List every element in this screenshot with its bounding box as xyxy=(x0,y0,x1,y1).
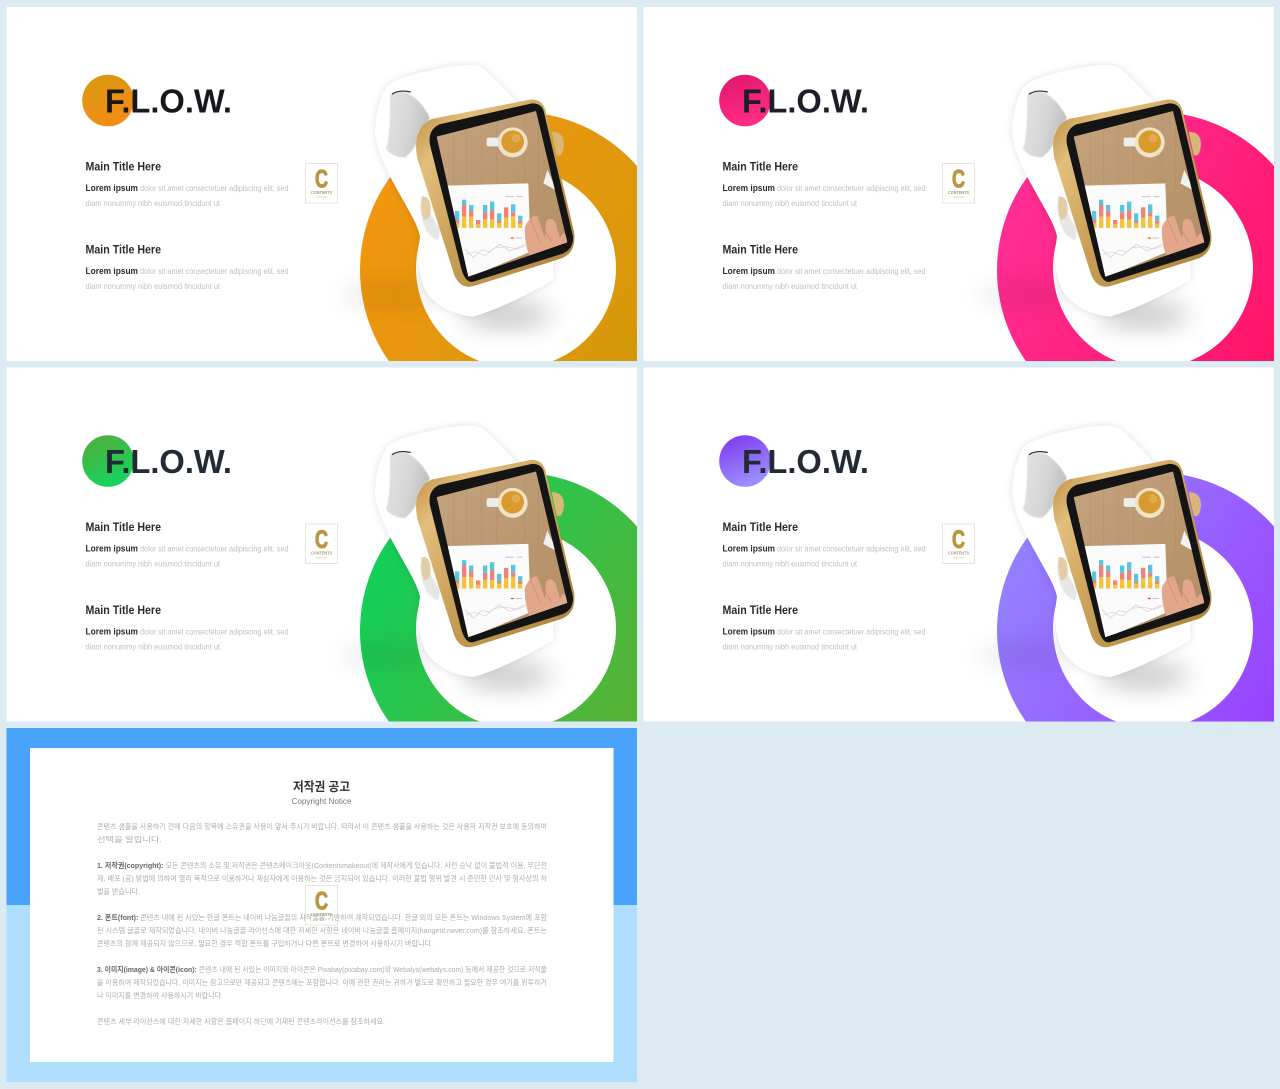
heading: F.L.O.W. with purple circle xyxy=(719,435,869,487)
text block: first item: Main Title Here xyxy=(722,162,798,174)
text block: font clause: 콘텐츠의 함께 제공되지 않으므로, 필요한 경우 적합 폰트를 구입하거나 다른 폰트로 변경하여 사용하시기 바랍니다. xyxy=(97,938,433,948)
text block: second item: Main Title Here xyxy=(86,244,161,256)
text block: first item: Main Title Here xyxy=(722,522,798,534)
heading: F.L.O.W. with orange circle: F.L.O.W. xyxy=(105,82,232,120)
text block: second item: dolor sit amet consectetuer adipiscing elit, sed xyxy=(777,267,926,276)
text block: first item: diam nonummy nibh euismod tincidunt ut xyxy=(722,560,858,568)
heading: F.L.O.W. with pink circle: F.L.O.W. xyxy=(742,82,869,120)
heading: copyright notice xyxy=(292,779,352,806)
text block: first item xyxy=(722,522,926,568)
icon: smart watch xyxy=(977,425,1211,685)
text block: second item: dolor sit amet consectetuer adipiscing elit, sed xyxy=(140,628,288,636)
text block: copyright clause: 벌을 받습니다. xyxy=(97,886,140,896)
text block: second item: dolor sit amet consectetuer adipiscing elit, sed xyxy=(777,628,926,636)
ring: green xyxy=(360,475,637,722)
ring: orange xyxy=(360,114,637,361)
text block: first item: dolor sit amet consectetuer adipiscing elit, sed xyxy=(777,544,926,554)
text block: first item: diam nonummy nibh euismod tincidunt ut xyxy=(86,199,221,208)
panel: green F.L.O.W. slide xyxy=(6,368,637,722)
text block: first item xyxy=(86,162,288,208)
text block: second item: diam nonummy nibh euismod tincidunt ut xyxy=(722,642,858,652)
text block: second item: Lorem ipsum xyxy=(722,626,775,638)
panel: purple F.L.O.W. slide xyxy=(644,368,1274,722)
text block: first item: Lorem ipsum xyxy=(86,544,138,554)
text block: first item: dolor sit amet consectetuer adipiscing elit, sed xyxy=(140,184,288,193)
text block: first item xyxy=(86,522,288,568)
text block: second item: Main Title Here xyxy=(722,244,798,256)
text block: first item: dolor sit amet consectetuer adipiscing elit, sed xyxy=(140,544,288,554)
text block: second item: Lorem ipsum xyxy=(86,626,138,638)
icon: contents logo xyxy=(942,164,974,203)
text block: image and icon clause: 3. 이미지(image) & 아이콘(icon): 콘텐츠 내에 된 사있는 이미지와 아이콘은 Pixabay(pixabay.com)와 Webalys(webalys.com) 등에서 제공한 것으로 저작물 xyxy=(97,964,547,974)
icon: smart watch xyxy=(340,425,574,685)
text block: copyright clause: 재, 배포 (공) 방법에 의하여 영리 목적으로 이용하거나 제삼자에게 이용하는 것은 금지되어 있습니다. 이러한 불법 행위 발견 시 준민한 민사 및 형사상의 처 xyxy=(97,873,547,883)
text block: font clause: 된 시스템 글꼴로 제작되었습니다. 네이버 나눔글꼴 라이선스에 대한 자세한 사항은 네이버 나눔글꼴 홈페이지(hangeul.naver.com)를 참조하세요. 폰트는 xyxy=(97,925,547,935)
text block: first item: Lorem ipsum xyxy=(86,183,138,194)
text block: second item xyxy=(86,244,288,291)
text block: license footer: 콘텐츠 세부 라이선스에 대한 자세한 사항은 홈페이지 하단에 기재된 콘텐츠라이선스를 참조하세요. xyxy=(97,1016,385,1026)
ring: pink xyxy=(997,114,1274,361)
text block: introduction xyxy=(97,821,547,844)
icon: contents logo xyxy=(306,164,338,203)
panel: orange F.L.O.W. slide xyxy=(6,7,637,361)
text block: introduction: 선택을 알립니다. xyxy=(97,834,162,844)
text block: second item xyxy=(86,605,288,652)
text block: first item: dolor sit amet consectetuer adipiscing elit, sed xyxy=(777,184,926,193)
text block: image and icon clause: 나 이미지를 변경하여 사용하시기 바랍니다. xyxy=(97,990,223,1000)
text block: second item: Lorem ipsum xyxy=(722,266,775,277)
icon: contents logo watermark xyxy=(306,886,338,925)
icon: contents logo xyxy=(942,524,974,564)
text block: first item: diam nonummy nibh euismod tincidunt ut xyxy=(722,199,858,208)
text block: first item: Lorem ipsum xyxy=(722,544,775,554)
text block: image and icon clause: 을 이용하여 제작되었습니다. 이미지는 참고으로만 제공되고 콘텐츠에는 포함합니다. 이에 관한 권리는 귀하가 별도로 확인하고 필요한 경우 여기를 위투하거 xyxy=(97,977,547,987)
text block: second item: dolor sit amet consectetuer adipiscing elit, sed xyxy=(140,267,288,276)
heading: F.L.O.W. with green circle: F.L.O.W. xyxy=(105,443,232,480)
icon: smart watch xyxy=(340,65,574,324)
text block: introduction: 콘텐츠 샘플을 사용하기 전에 다음의 항목에 소유권을 사용이 앞서 주시기 바랍니다. 따라서 이 콘텐츠 샘플을 사용하는 것은 사용자 저작권 보호에 동의하여 xyxy=(97,821,547,831)
heading: F.L.O.W. with pink circle xyxy=(719,75,869,126)
text block: second item: diam nonummy nibh euismod tincidunt ut xyxy=(722,282,858,291)
text block: second item: Main Title Here xyxy=(722,605,798,617)
icon: smart watch xyxy=(977,65,1211,324)
heading: copyright notice: Copyright Notice xyxy=(292,796,352,806)
text block: second item xyxy=(722,244,926,291)
text block: copyright clause xyxy=(97,860,547,896)
panel: copyright notice xyxy=(6,728,637,1082)
text block: image and icon clause xyxy=(97,964,547,1000)
panel: pink F.L.O.W. slide xyxy=(644,7,1274,361)
text block: font clause xyxy=(97,912,547,948)
ring: purple xyxy=(997,475,1274,722)
text block: second item: Lorem ipsum xyxy=(86,266,138,277)
text block: copyright clause: 1. 저작권(copyright): 모든 콘텐츠의 소유 및 저작권은 콘텐츠메이크아웃(Contentsmakeout)에 제작사에게 있습니다. 사전 승낙 없이 불법적 이용, 무단전 xyxy=(97,860,547,870)
heading: F.L.O.W. with orange circle xyxy=(82,75,232,126)
text block: first item xyxy=(722,162,926,208)
text block: font clause: 2. 폰트(font): 콘텐츠 내에 된 사있는 한글 폰트는 네이버 나눔글꼴의 저작물을 기반하여 제작되었습니다. 한글 외의 모든 폰트는 Windows System에 포함 xyxy=(97,912,547,922)
heading: copyright notice: 저작권 공고 xyxy=(293,779,350,794)
text block: second item: diam nonummy nibh euismod tincidunt ut xyxy=(86,282,221,291)
icon: contents logo xyxy=(306,524,338,564)
text block: second item: Main Title Here xyxy=(86,605,161,617)
text block: first item: Lorem ipsum xyxy=(722,183,775,194)
text block: first item: Main Title Here xyxy=(86,522,161,534)
text block: first item: Main Title Here xyxy=(86,162,161,174)
heading: F.L.O.W. with green circle xyxy=(82,435,232,487)
text block: second item xyxy=(722,605,926,652)
heading: F.L.O.W. with purple circle: F.L.O.W. xyxy=(742,443,869,480)
text block: first item: diam nonummy nibh euismod tincidunt ut xyxy=(86,560,221,568)
text block: second item: diam nonummy nibh euismod tincidunt ut xyxy=(86,642,221,652)
